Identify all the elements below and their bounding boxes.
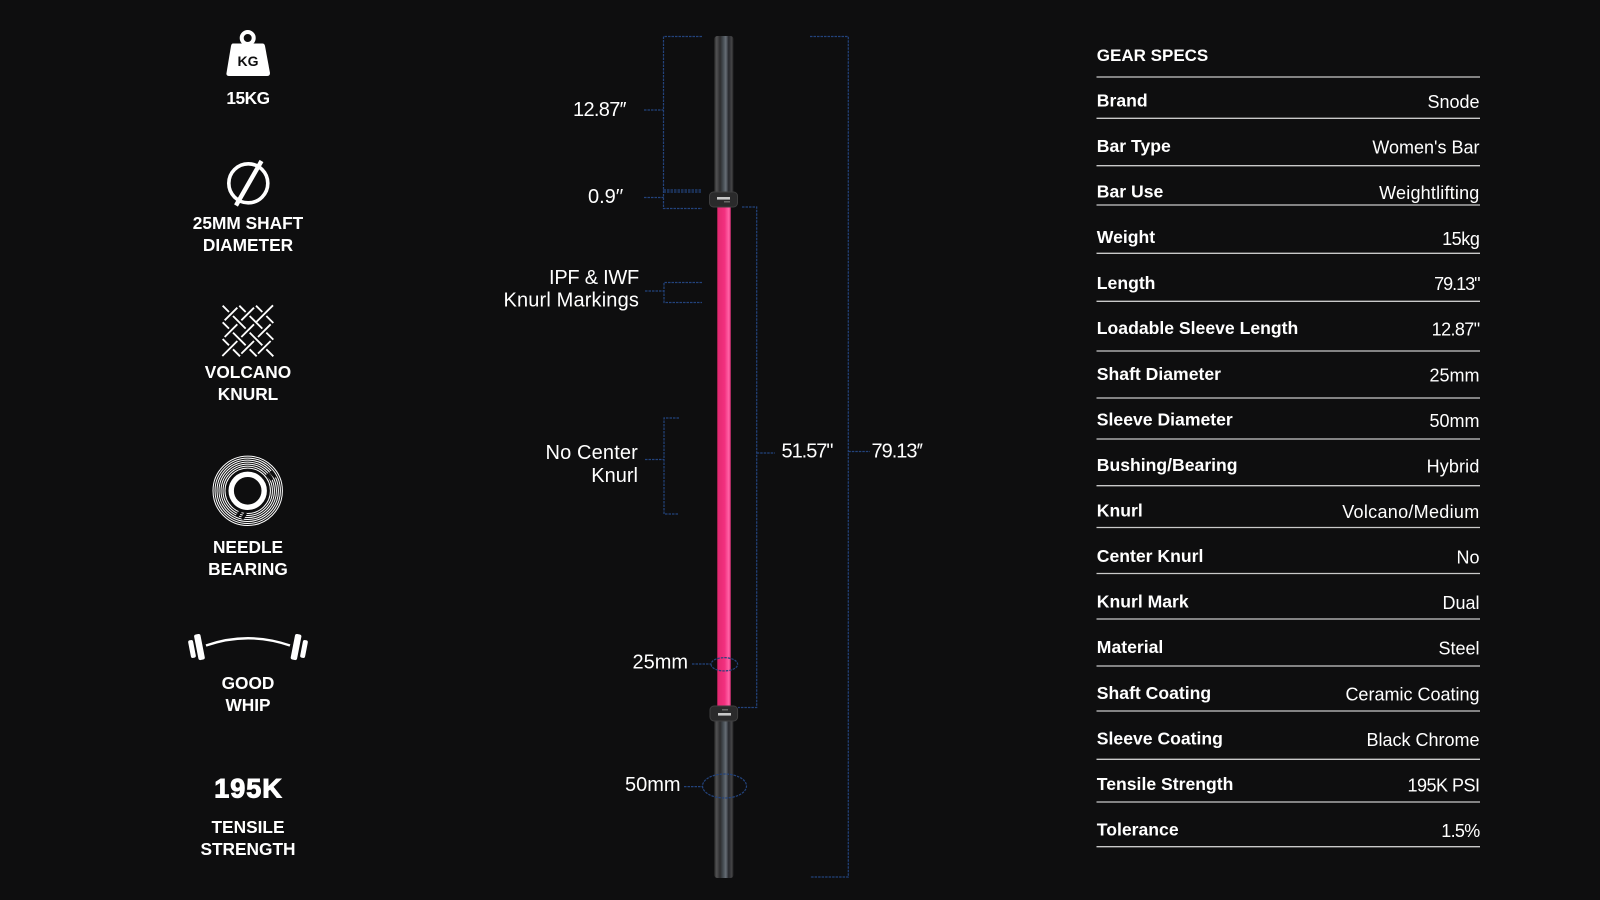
dimension label: 79.13: 79.13′′	[872, 440, 923, 462]
row: sleeve coating: Sleeve Coating	[1097, 728, 1223, 748]
row: brand: Snode	[1427, 92, 1480, 112]
barbell	[710, 36, 738, 878]
row: length: Length	[1097, 273, 1155, 293]
bracket: knurl markings	[645, 282, 702, 302]
row: shaft diameter	[1096, 364, 1480, 398]
row: sleeve coating: Black Chrome	[1366, 730, 1480, 750]
icon: bending barbell	[188, 634, 308, 660]
label: good whip: WHIP	[225, 695, 271, 715]
row: knurl mark	[1096, 592, 1480, 619]
label: volcano knurl: VOLCANO	[205, 362, 291, 382]
row: tensile strength: Tensile Strength	[1097, 774, 1233, 794]
icon: bearing rings	[213, 456, 282, 526]
row: center knurl	[1096, 546, 1480, 574]
dimension label: IPF & IWF knurl markings: IPF & IWF	[549, 267, 639, 289]
dimension label: 0.9: 0.9′′	[588, 186, 624, 208]
row: weight: 15kg	[1442, 229, 1480, 249]
label: tensile strength: TENSILE	[212, 817, 284, 837]
row: brand	[1096, 90, 1480, 118]
row: tolerance: 1.5%	[1441, 821, 1480, 841]
row: sleeve coating	[1096, 728, 1480, 759]
label: tensile strength: STRENGTH	[200, 839, 296, 859]
bracket: 12.87 and 0.9	[644, 36, 702, 208]
row: loadable sleeve length	[1096, 318, 1480, 351]
row: length: 79.13"	[1434, 274, 1480, 294]
dimension label: 50mm: 50mm	[625, 774, 681, 796]
row: bar use: Weightlifting	[1379, 183, 1480, 203]
stat: 195K: 195K	[214, 774, 283, 804]
panel: gear specs table	[1096, 46, 1480, 847]
ellipse: 50mm	[684, 774, 746, 798]
feature: shaft diameter	[193, 161, 304, 255]
row: brand: Brand	[1097, 90, 1148, 110]
bottom collar	[710, 706, 738, 721]
row: knurl	[1096, 500, 1480, 528]
row: shaft diameter: Shaft Diameter	[1097, 364, 1221, 384]
row: sleeve diameter	[1096, 410, 1480, 439]
label: needle bearing: BEARING	[208, 559, 288, 579]
row: knurl mark: Dual	[1442, 593, 1480, 613]
row: bushing/bearing: Bushing/Bearing	[1097, 455, 1238, 475]
heading: gear specs: GEAR SPECS	[1097, 46, 1208, 65]
row: shaft coating: Ceramic Coating	[1345, 684, 1480, 704]
row: center knurl: Center Knurl	[1097, 546, 1203, 566]
row: tolerance: Tolerance	[1097, 820, 1179, 840]
label: 25mm shaft diameter: DIAMETER	[203, 235, 294, 255]
dimension brackets	[644, 36, 870, 877]
feature: volcano knurl	[205, 305, 291, 404]
feature: needle bearing	[208, 456, 288, 579]
dimension label: 25mm: 25mm	[632, 652, 688, 674]
row: shaft diameter: 25mm	[1429, 366, 1480, 386]
label: needle bearing: NEEDLE	[213, 537, 283, 557]
row: loadable sleeve length: 12.87"	[1432, 320, 1480, 340]
icon: diameter symbol	[229, 161, 268, 206]
row: length	[1096, 273, 1480, 301]
row: bushing/bearing	[1096, 455, 1480, 486]
row: knurl mark: Knurl Mark	[1097, 592, 1189, 612]
top collar	[710, 192, 738, 207]
icon: knurl lattice	[222, 305, 273, 356]
dimension label: no center knurl: No Center	[545, 442, 638, 464]
row: sleeve diameter: Sleeve Diameter	[1097, 410, 1233, 430]
row: bushing/bearing: Hybrid	[1427, 456, 1480, 476]
top sleeve	[714, 36, 734, 196]
row: material: Steel	[1438, 638, 1480, 658]
row: bar use: Bar Use	[1097, 182, 1164, 202]
dimension label: 12.87: 12.87′′	[573, 99, 627, 121]
bracket: no center knurl	[645, 418, 679, 514]
row: shaft coating: Shaft Coating	[1097, 683, 1211, 703]
dimension label: IPF & IWF knurl markings: Knurl Markings	[504, 290, 639, 312]
row: bar use	[1096, 182, 1480, 205]
feature: 15KG weight	[226, 32, 270, 108]
row: loadable sleeve length: Loadable Sleeve Length	[1097, 318, 1298, 338]
row: tensile strength: 195K PSI	[1407, 776, 1480, 796]
row: weight: Weight	[1097, 227, 1155, 247]
label: volcano knurl: KNURL	[218, 384, 279, 404]
row: knurl: Volcano/Medium	[1342, 502, 1480, 522]
dimension label: no center knurl: Knurl	[591, 465, 638, 487]
row: material: Material	[1097, 637, 1163, 657]
diagram: barbell with dimensions	[504, 36, 923, 878]
row: sleeve diameter: 50mm	[1429, 411, 1480, 431]
ellipse: 25mm	[692, 658, 738, 671]
row: center knurl: No	[1456, 548, 1480, 568]
row: bar type	[1096, 136, 1480, 166]
feature: tensile strength	[200, 774, 296, 859]
bracket: 51.57	[738, 207, 775, 708]
icon: kettle weight: KG	[238, 53, 259, 69]
bottom sleeve	[714, 717, 734, 878]
row: shaft coating	[1096, 683, 1480, 711]
row: knurl: Knurl	[1097, 500, 1143, 520]
panel: feature icons	[188, 32, 308, 859]
row: bar type: Bar Type	[1097, 136, 1171, 156]
row: tensile strength	[1096, 774, 1480, 802]
row: tolerance	[1096, 820, 1480, 847]
feature: good whip	[188, 634, 308, 715]
row: bar type: Women's Bar	[1372, 138, 1480, 158]
label: good whip: GOOD	[222, 673, 274, 693]
dimension label: 51.57: 51.57"	[782, 440, 834, 462]
label: 25mm shaft diameter: 25MM SHAFT	[193, 213, 304, 233]
pink shaft	[717, 205, 731, 708]
label: 15KG: 15KG	[226, 88, 270, 108]
row: weight	[1096, 227, 1480, 253]
bracket: 79.13	[810, 36, 870, 877]
row: material	[1096, 637, 1480, 666]
